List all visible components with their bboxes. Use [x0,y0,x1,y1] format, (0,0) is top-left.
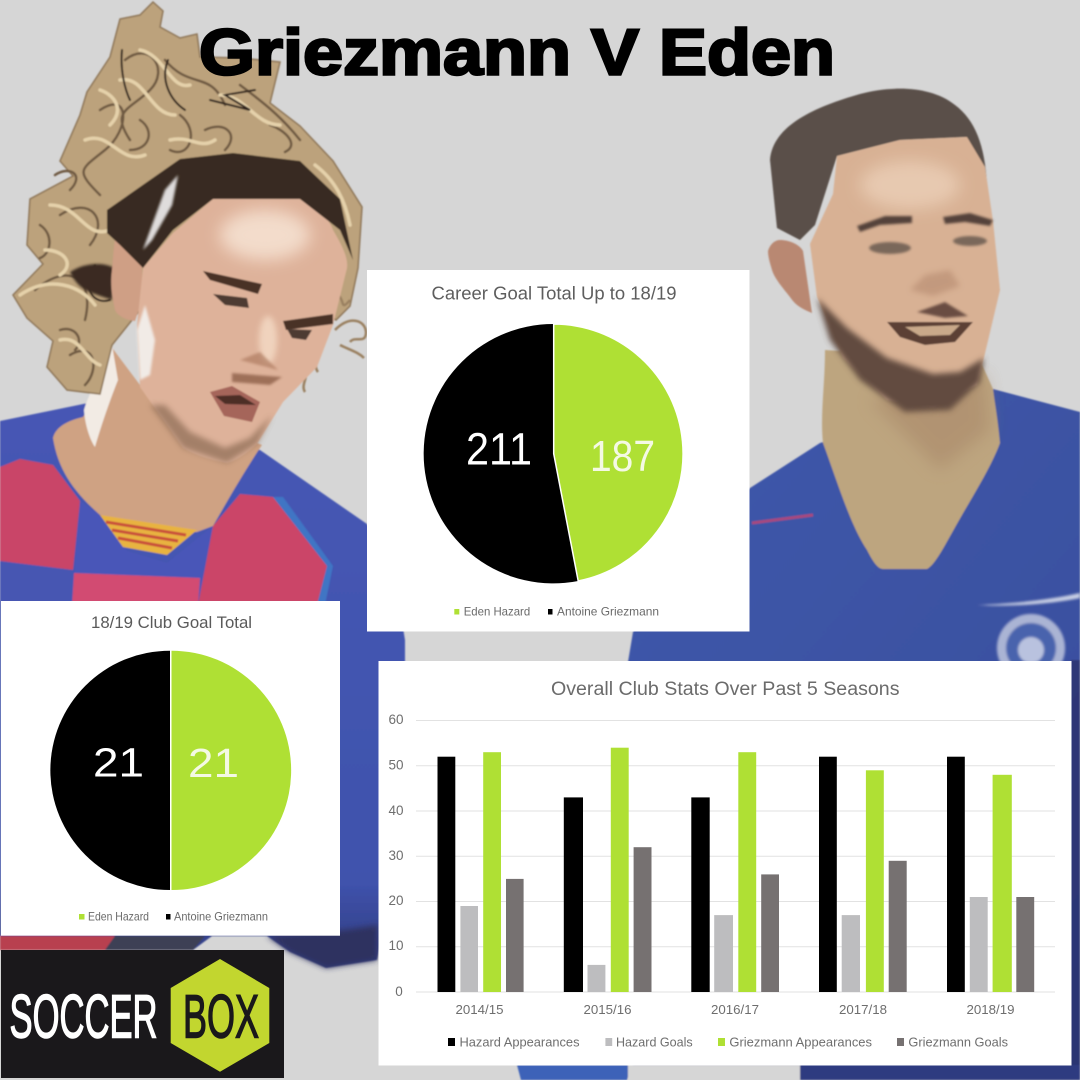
x axis labels: 2014/15 [456,1002,504,1017]
hair wisps on the right [304,295,366,392]
shirt red block lower centre [72,573,200,605]
chart title: Overall Club Stats Over Past 5 Seasons [551,679,900,700]
panel: 18/19 club goal total pie chart [1,601,340,936]
panel: career goal total pie chart [367,270,750,632]
neck shadow [870,375,990,470]
y axis labels: 30 [388,848,404,863]
lower arm shadow [267,925,378,968]
right eyebrow [283,314,333,330]
hair mass [13,2,362,394]
dark hair shadow beside ear [70,264,114,300]
legend: Hazard Appearances [460,1034,580,1050]
nose shadow [910,270,960,296]
left eye [869,242,911,254]
gray gap at bottom [628,1065,800,1080]
nose highlight [259,316,277,364]
body and arm [0,402,405,968]
legend: Griezmann Appearances [729,1034,872,1050]
bars: 2014/15 [438,752,524,992]
beard [817,298,984,412]
logo wordmark: SOCCER: SOCCER [10,982,158,1050]
shirt blue stripe left [0,561,73,605]
value: 187: 187 [590,432,655,481]
bars: 2015/16 [564,748,652,992]
collar stripes [100,515,197,555]
mouth [887,322,973,345]
legend [454,604,659,618]
y axis labels: 60 [388,712,404,727]
legend: Eden Hazard [464,604,530,618]
face [137,199,347,463]
x axis labels: 2016/17 [711,1002,759,1017]
teeth [905,325,960,336]
player photo: Hazard [517,89,1080,1080]
shirt red block left [0,459,80,570]
dark right edge [1071,660,1080,1080]
legend: Eden Hazard [88,910,149,924]
ear [768,240,812,313]
bars: 2016/17 [691,752,779,992]
moustache [917,302,968,318]
dark hair band [107,153,353,268]
shirt blue centre [72,501,213,605]
lower arm patch [517,1065,632,1080]
neck highlight [84,345,118,447]
shirt shoulder highlight [273,497,333,605]
forehead highlight [860,161,960,209]
x axis labels: 2015/16 [584,1002,632,1017]
y axis labels: 20 [388,893,404,908]
chart title: 18/19 Club Goal Total [91,614,252,632]
cheek highlight [137,305,155,380]
pie slice: Griezmann 211 [424,324,578,583]
panel: overall club stats bar chart [378,661,1072,1066]
left eye [213,294,249,308]
hair [770,89,987,240]
lower shirt navy panel [105,936,205,950]
bars: 2018/19 [947,757,1034,992]
y axis labels: 10 [388,938,404,953]
legend: Antoine Griezmann [174,910,268,924]
y axis labels [388,712,404,999]
moustache [232,373,282,385]
pie slice: Hazard 21 [172,651,291,890]
forehead highlight [220,210,310,260]
right eye [287,329,312,340]
lower torso patch [800,1065,1080,1080]
y axis labels: 0 [395,984,403,999]
bars: 2017/18 [819,757,907,992]
right eyebrow [943,213,993,226]
logo hexagon [171,959,269,1072]
swoosh [977,593,1080,606]
stubble shading [150,405,272,463]
value: left 21: 21 [93,740,144,786]
neck [822,350,1000,569]
nose shadow [240,352,278,370]
legend: Griezmann Goals [908,1034,1008,1050]
left eyebrow [857,216,912,232]
pie slice: Hazard 187 [554,324,683,581]
logo wordmark: BOX: BOX [183,982,259,1050]
title: Griezmann V Eden [199,16,835,88]
logo: Soccer Box [1,950,284,1078]
right eye [953,236,987,246]
legend [448,1034,1008,1050]
hair curls [20,50,350,385]
player photo: Griezmann [0,2,405,968]
legend [79,910,268,924]
value: right 21: 21 [188,740,239,786]
ear [111,215,142,321]
neck [53,345,262,532]
face [810,137,1000,408]
chart title: Career Goal Total Up to 18/19 [432,284,676,304]
shirt [517,389,1080,1080]
shirt red block right [198,494,327,605]
x axis labels: 2017/18 [839,1002,887,1017]
shirt stripe [752,515,813,523]
pie slice: Griezmann 21 [50,651,170,890]
legend: Antoine Griezmann [557,604,659,618]
mouth inner [215,395,256,405]
value: 211: 211 [466,424,532,474]
y axis labels: 50 [388,758,404,772]
y axis labels: 40 [388,803,404,818]
x axis labels [456,1002,1014,1017]
club crest [997,614,1065,682]
mouth [210,386,260,422]
legend: Hazard Goals [616,1034,693,1050]
left eyebrow [203,271,262,294]
hair grey streak [143,175,178,250]
x axis labels: 2018/19 [966,1002,1014,1017]
lower shirt red panel [0,936,115,950]
grid lines [416,720,1055,992]
